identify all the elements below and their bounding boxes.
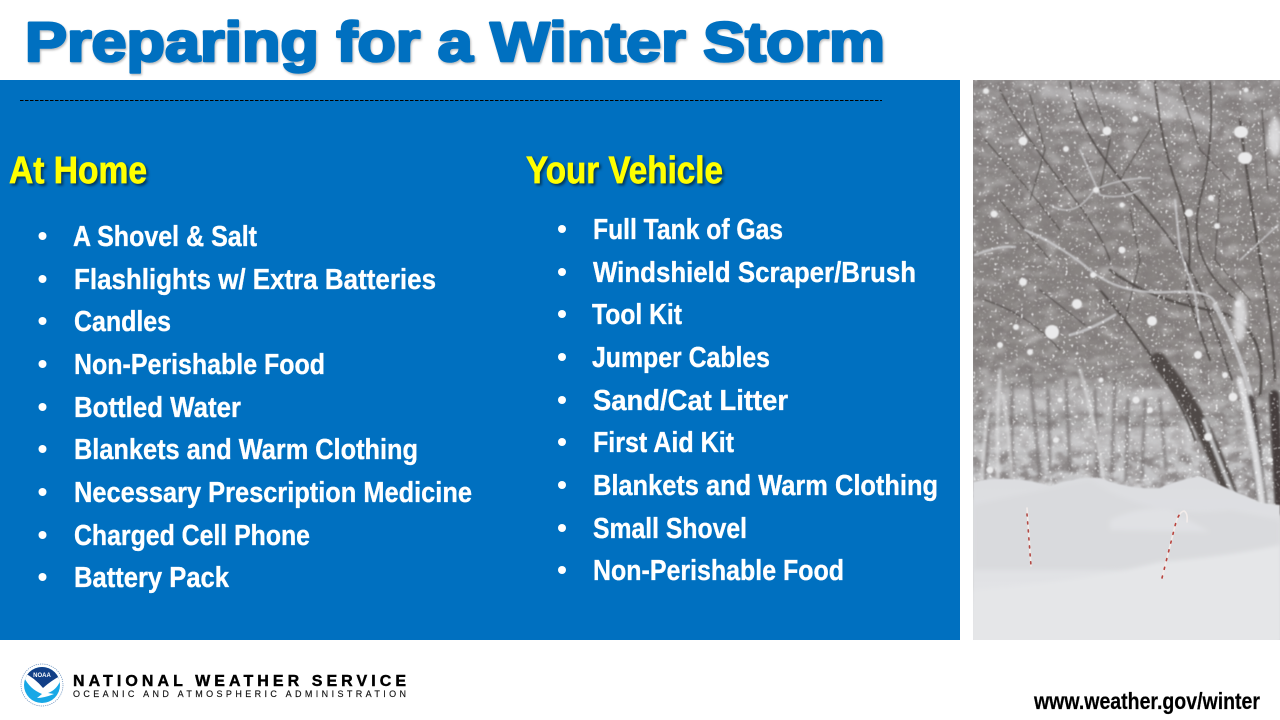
panel: checklist background: [0, 80, 960, 640]
list: At Home items: Flashlights w/ Extra Batteries: [74, 264, 436, 296]
list: Your Vehicle items: Non-Perishable Food: [593, 555, 844, 587]
logo: NOAA emblem: NOAA: [33, 673, 51, 679]
snow ground: [973, 476, 1280, 640]
list: Your Vehicle items: [558, 214, 938, 587]
list: Your Vehicle items: Full Tank of Gas: [593, 214, 783, 246]
distant trunks: [985, 370, 1166, 480]
list: At Home items: Necessary Prescription Medicine: [74, 477, 472, 509]
logo: NOAA emblem: [21, 664, 63, 706]
snowy branches: [975, 150, 1278, 400]
photo: snowy forest: [970, 80, 1280, 645]
candy cane stakes: [1027, 508, 1187, 578]
heading: Your Vehicle: Your Vehicle: [526, 150, 723, 192]
list: Your Vehicle items: First Aid Kit: [593, 427, 734, 459]
list: Your Vehicle items: Small Shovel: [593, 513, 747, 545]
falling snow over trees: [973, 80, 1280, 505]
list: At Home items: Candles: [74, 306, 171, 338]
logo text: National Weather Service: NATIONAL WEATHER SERVICE: [73, 673, 406, 690]
list: Your Vehicle items: Blankets and Warm Clothing: [593, 470, 938, 502]
dark branches: [985, 82, 1275, 440]
list: Your Vehicle items: Sand/Cat Litter: [593, 385, 788, 417]
title: Preparing for a Winter Storm: [25, 10, 885, 73]
snow drifts: [973, 562, 1280, 640]
list: At Home items: Blankets and Warm Clothing: [74, 434, 418, 466]
list: At Home items: Bottled Water: [74, 392, 241, 424]
list: At Home items: Non-Perishable Food: [74, 349, 325, 381]
list: Your Vehicle items: Jumper Cables: [592, 342, 770, 374]
heading: At Home: At Home: [9, 150, 147, 192]
list: At Home items: [38, 221, 472, 594]
list: Your Vehicle items: Windshield Scraper/Brush: [593, 257, 916, 289]
list: Your Vehicle items: Tool Kit: [592, 299, 682, 331]
snowflakes: [983, 88, 1272, 474]
tree trunks: [1158, 360, 1280, 510]
list: At Home items: Charged Cell Phone: [74, 520, 310, 552]
logo text: Oceanic and Atmospheric Administration: OCEANIC AND ATMOSPHERIC ADMINISTRATION: [73, 689, 406, 699]
list: At Home items: A Shovel & Salt: [73, 221, 257, 253]
list: At Home items: Battery Pack: [74, 562, 230, 594]
